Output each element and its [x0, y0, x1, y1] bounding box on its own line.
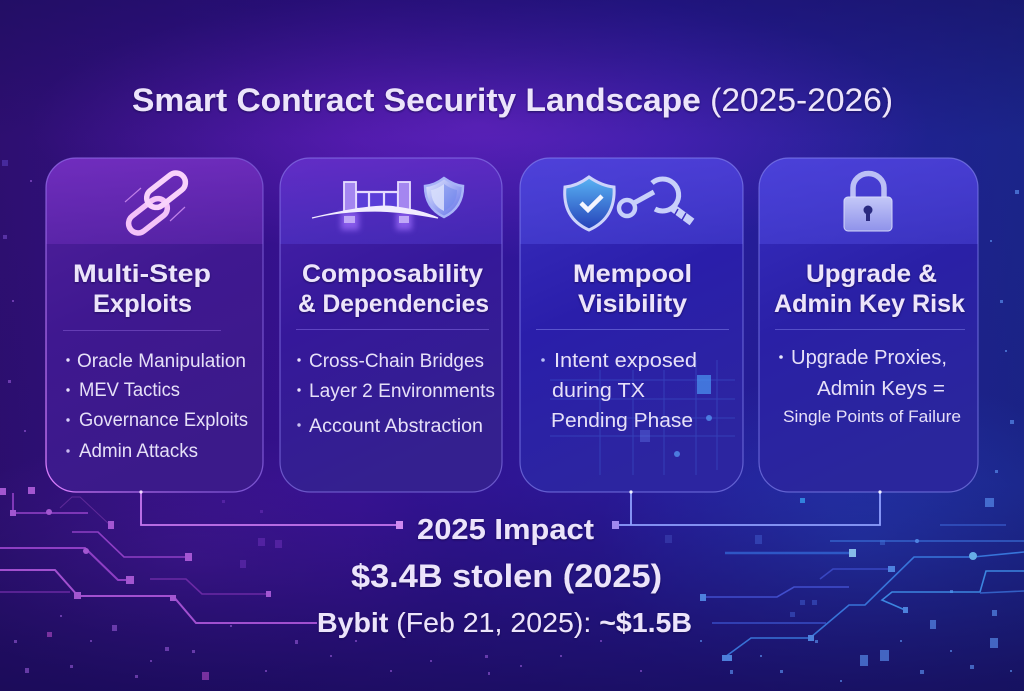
impact figure: $3.4B stolen (2025) — [351, 558, 662, 594]
background particles — [2, 160, 642, 680]
list: composability and dependencies: Account Abstraction — [309, 416, 483, 437]
list: composability and dependencies: Layer 2 Environments — [309, 381, 495, 402]
list: composability and dependencies: Cross-Chain Bridges — [309, 351, 484, 372]
text: mempool detail — [541, 350, 697, 432]
icon: chain link — [119, 169, 195, 237]
text: upgrade detail: Admin Keys = — [817, 378, 945, 400]
panel: composability and dependencies — [280, 158, 502, 492]
text: mempool detail: during TX — [552, 380, 645, 402]
connector: left cards to impact — [139, 490, 403, 529]
icon: shield with check — [565, 177, 614, 230]
list: multi-step exploits: Governance Exploits — [79, 410, 248, 431]
heading: mempool visibility: Visibility — [578, 290, 687, 318]
chart decoration: grid — [550, 360, 735, 475]
text: upgrade detail: Upgrade Proxies, — [791, 347, 947, 369]
heading: composability and dependencies: Composability — [302, 260, 483, 288]
connector: right cards to impact — [612, 490, 882, 529]
list: multi-step exploits — [66, 351, 248, 462]
panel: multi-step exploits — [46, 158, 263, 492]
circuit traces: left — [0, 487, 317, 623]
heading: composability and dependencies: & Dependencies — [298, 290, 489, 318]
panel: mempool visibility — [520, 158, 743, 492]
icon: bridge — [312, 182, 438, 230]
heading: multi-step exploits: Exploits — [93, 290, 192, 318]
text: upgrade detail: Single Points of Failure — [783, 407, 961, 426]
circuit traces: right — [700, 525, 1024, 661]
icon: shield — [425, 178, 463, 217]
text: mempool detail: Intent exposed — [554, 350, 697, 372]
list: multi-step exploits: Oracle Manipulation — [77, 351, 246, 372]
text: upgrade detail — [779, 347, 961, 426]
list: composability and dependencies — [297, 351, 495, 437]
list: multi-step exploits: Admin Attacks — [79, 441, 198, 462]
icon: padlock — [844, 174, 892, 231]
icon: magnifier key — [619, 179, 692, 222]
heading: upgrade and admin key risk: Admin Key Risk — [774, 290, 965, 318]
impact detail: Bybit (Feb 21, 2025): ~$1.5B — [317, 607, 692, 638]
text: mempool detail: Pending Phase — [551, 410, 693, 432]
heading: multi-step exploits: Multi-Step — [73, 260, 211, 288]
title: Smart Contract Security Landscape (2025-2026) — [132, 82, 893, 118]
impact heading: 2025 Impact — [417, 514, 594, 546]
list: multi-step exploits: MEV Tactics — [79, 380, 180, 401]
panel: upgrade and admin key risk — [759, 158, 978, 492]
heading: mempool visibility: Mempool — [573, 260, 692, 288]
heading: upgrade and admin key risk: Upgrade & — [806, 260, 937, 288]
background particles blue — [665, 190, 1019, 682]
